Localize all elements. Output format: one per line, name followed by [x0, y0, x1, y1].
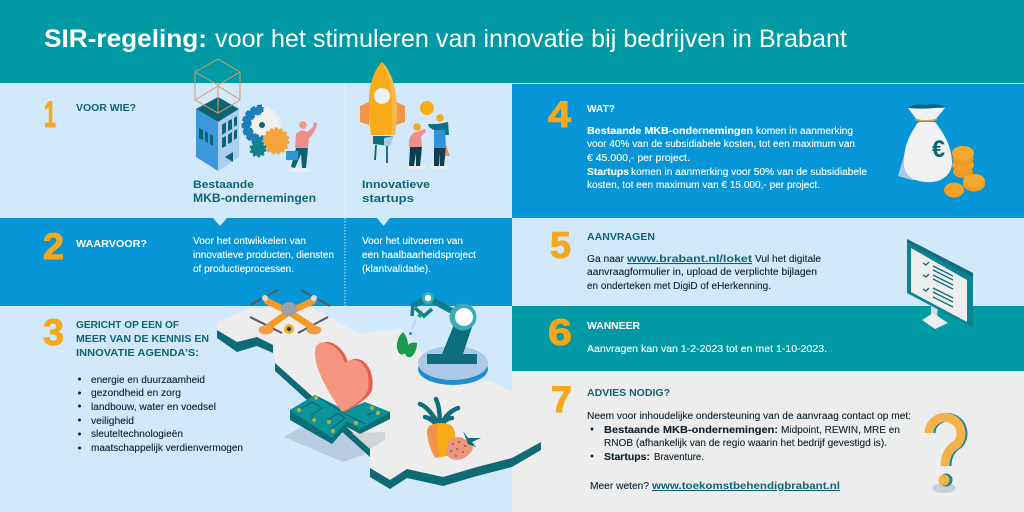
heading: advies nodig: ADVIES NODIG?	[587, 388, 670, 399]
text: waarvoor startups: Voor het uitvoeren van	[362, 236, 463, 247]
text: meer weten link: Meer weten?	[590, 481, 649, 492]
subheading: innovatieve startups: Innovatieve	[362, 179, 430, 191]
text: aanvragen instructions: aanvraagformulier in, upload de verplichte bijlagen	[587, 267, 817, 278]
text: subsidie percentages: komen in aanmerking voor 50% van de subsidiabele	[631, 167, 867, 178]
number 1: 1	[44, 94, 56, 135]
title: SIR-regeling:	[44, 25, 207, 53]
text: subsidie percentages: Startups	[587, 167, 629, 178]
text: advies contacts	[587, 411, 911, 463]
callout pointer: startups	[377, 218, 390, 226]
heading: wanneer: WANNEER	[587, 321, 641, 332]
bullet list: agenda themes: gezondheid en zorg	[91, 388, 181, 399]
panel background: waarvoor	[0, 218, 512, 306]
rocket	[360, 62, 405, 163]
heading: aanvragen: AANVRAGEN	[587, 232, 655, 243]
text: meer weten link	[590, 480, 840, 492]
panel background: aanvragen	[512, 218, 1024, 306]
heading: voor wie: VOOR WIE?	[76, 103, 136, 114]
bullet list: agenda themes: maatschappelijk verdienvermogen	[91, 443, 243, 454]
bullet list: agenda themes: energie en duurzaamheid	[91, 375, 205, 386]
number 3: 3	[43, 312, 64, 353]
text: waarvoor startups	[362, 236, 476, 275]
text: aanvraagperiode: Aanvragen kan van 1-2-2023 tot en met 1-10-2023.	[587, 344, 827, 355]
heading: gericht op kennis en innovatie agenda's: MEER VAN DE KENNIS EN	[76, 334, 209, 345]
icon: computer monitor with checklist	[907, 239, 973, 329]
panel background: kennis en innovatie agenda's	[0, 306, 512, 512]
person with briefcase	[286, 121, 317, 172]
icon: drone	[250, 290, 330, 334]
icon: pineapple and strawberry	[420, 399, 481, 460]
map of Brabant	[217, 308, 541, 489]
euro sign: €	[932, 136, 945, 163]
bullet list: agenda themes	[78, 375, 243, 454]
text: advies contacts: RNOB (afhankelijk van de regio waarin het bedrijf gevestigd is).	[604, 438, 887, 449]
text: aanvragen instructions: www.brabant.nl/loket	[626, 253, 753, 265]
chip shadow on panel	[284, 428, 366, 462]
icon: money bag with coins	[898, 104, 985, 198]
number 2: 2	[43, 226, 64, 267]
heading: gericht op kennis en innovatie agenda's: GERICHT OP EEN OF	[76, 320, 179, 331]
heading: wat: WAT?	[587, 104, 615, 115]
text: waarvoor startups: (klantvalidatie).	[362, 264, 431, 275]
text: waarvoor bestaande: Voor het ontwikkelen van	[193, 236, 306, 247]
text: advies contacts: Braventure.	[654, 452, 704, 463]
text: subsidie percentages: komen in aanmerking	[756, 126, 853, 137]
panel background: wanneer	[512, 306, 1024, 371]
text: waarvoor bestaande	[193, 236, 334, 275]
bullet list: agenda themes: landbouw, water en voedsel	[91, 402, 216, 413]
subheading: bestaande mkb-ondernemingen	[193, 179, 316, 205]
icon: robot arm with plant	[397, 292, 488, 385]
text: advies contacts: Midpoint, REWIN, MRE en	[781, 425, 900, 436]
panel background: wat	[512, 83, 1024, 218]
icon: building with gears and person	[195, 59, 317, 172]
text: waarvoor bestaande: innovatieve producten, diensten	[193, 250, 334, 261]
text: aanvragen instructions: Ga naar	[587, 254, 625, 265]
text: aanvragen instructions: en onderteken met DigiD of eHerkenning.	[587, 281, 771, 292]
text: meer weten link: www.toekomstbehendigbrabant.nl	[651, 480, 840, 492]
text: advies contacts: Neem voor inhoudelijke ondersteuning van de aanvraag contact op met:	[587, 411, 911, 422]
text: advies contacts: Startups:	[604, 452, 650, 463]
text: subsidie percentages: € 45.000,- per project.	[587, 153, 690, 164]
bullet list: agenda themes: sleuteltechnologieën	[91, 429, 183, 440]
number 7: 7	[551, 379, 572, 420]
text: subsidie percentages: voor 40% van de subsidiabele kosten, tot een maximum van	[587, 139, 855, 150]
bullet list: agenda themes: veiligheid	[91, 416, 134, 427]
heading: gericht op kennis en innovatie agenda's	[76, 320, 209, 359]
text: aanvragen instructions	[587, 253, 821, 292]
light bulb	[420, 101, 434, 119]
text: advies contacts: Bestaande MKB-ondernemingen:	[604, 425, 778, 436]
icon: circuit chip with heart	[290, 342, 390, 449]
number 4: 4	[548, 94, 571, 135]
wireframe cube	[195, 59, 240, 113]
panel background: voor wie	[0, 83, 512, 218]
icon: rocket and startup team	[360, 62, 450, 169]
subheading: bestaande mkb-ondernemingen: Bestaande	[193, 179, 254, 191]
heart	[318, 342, 373, 412]
subheading: innovatieve startups	[362, 179, 430, 205]
text: subsidie percentages: kosten, tot een maximum van € 15.000,- per project.	[587, 180, 820, 191]
heading: gericht op kennis en innovatie agenda's: INNOVATIE AGENDA’S:	[76, 348, 199, 359]
text: waarvoor startups: een haalbaarheidsproject	[362, 250, 476, 261]
icon: question mark	[929, 417, 963, 493]
panel background: advies nodig	[512, 371, 1024, 512]
team of two people	[406, 114, 450, 169]
callout pointer: bestaande	[213, 218, 227, 226]
heading: waarvoor: WAARVOOR?	[76, 239, 147, 250]
text: waarvoor bestaande: of productieprocessen.	[193, 264, 294, 275]
building	[196, 97, 239, 171]
gears	[243, 106, 288, 156]
leaf	[397, 332, 417, 357]
text: aanvragen instructions: Vul het digitale	[755, 254, 821, 265]
title: voor het stimuleren van innovatie bij bedrijven in Brabant	[215, 25, 847, 53]
text: subsidie percentages	[587, 126, 867, 191]
number 5: 5	[550, 225, 571, 266]
subheading: innovatieve startups: startups	[362, 193, 414, 205]
coins	[944, 146, 985, 198]
number 6: 6	[548, 312, 572, 353]
subheading: bestaande mkb-ondernemingen: MKB-ondernemingen	[193, 193, 316, 205]
text: subsidie percentages: Bestaande MKB-ondernemingen	[587, 126, 753, 137]
header band	[0, 0, 1024, 83]
